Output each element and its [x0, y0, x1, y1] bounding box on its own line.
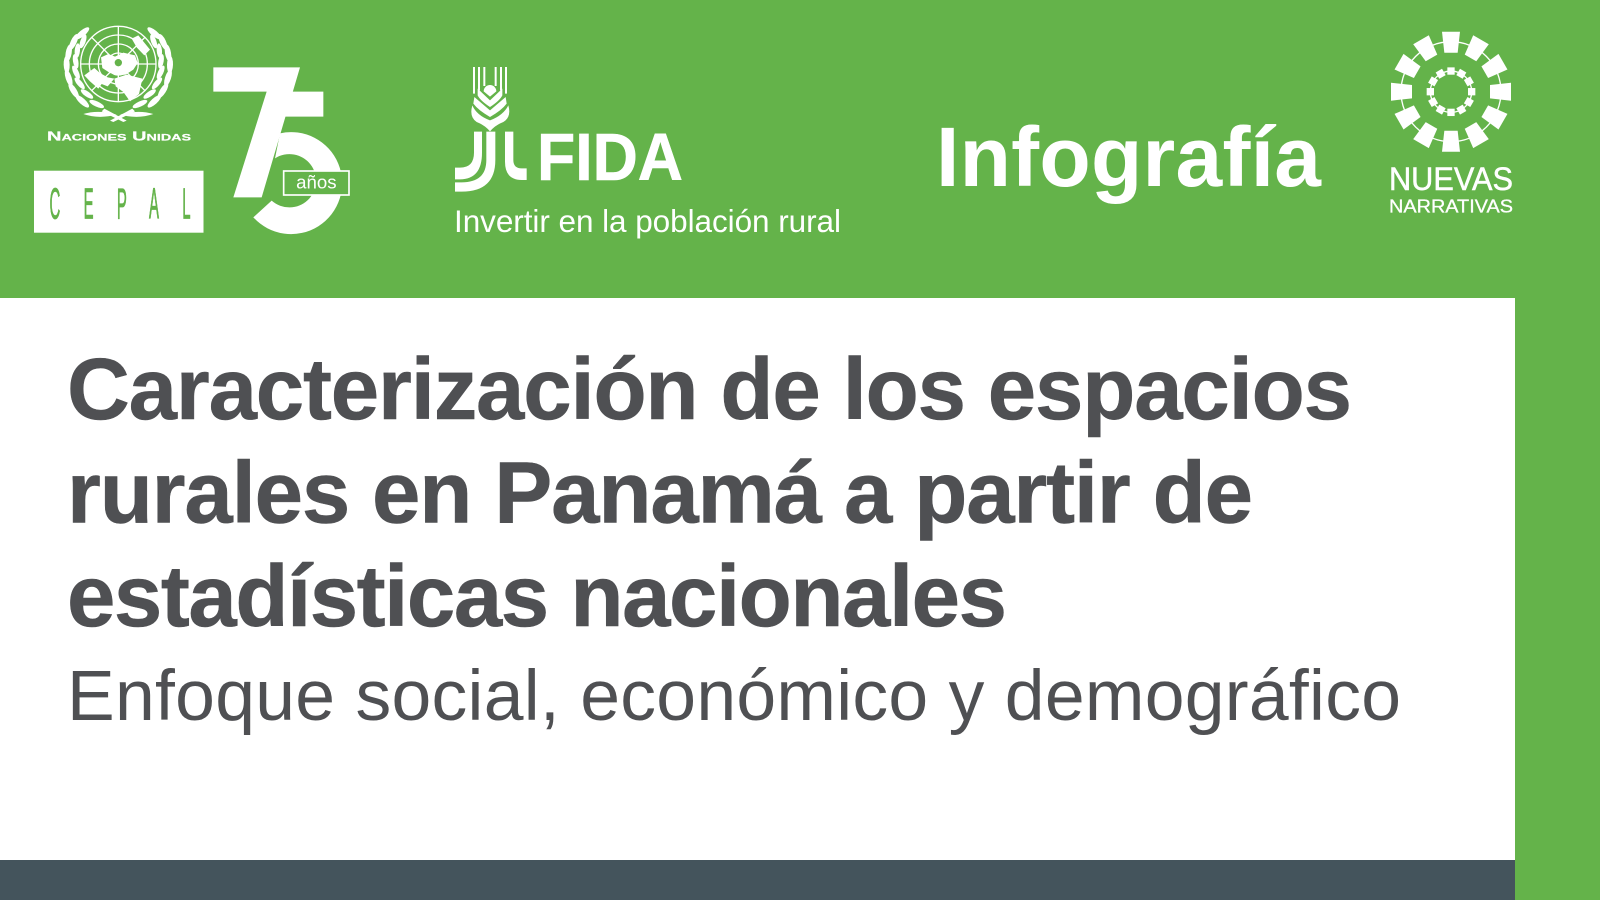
- logo text: Naciones Unidas: Naciones Unidas: [47, 130, 191, 144]
- logo text: Nuevas Narrativas: NUEVAS: [1389, 161, 1513, 197]
- logo text: Nuevas Narrativas: NARRATIVAS: [1389, 196, 1513, 217]
- tagline: Invertir en la población rural: Invertir en la población rural: [454, 203, 841, 239]
- white title panel: [0, 298, 1515, 860]
- logo: CEPAL box: CEPAL: [50, 178, 191, 228]
- logo: FIDA JJL mark: [455, 132, 527, 192]
- logo text: Nuevas Narrativas: [1389, 161, 1513, 217]
- dark footer bar: [0, 860, 1515, 900]
- title: rurales en Panamá a partir de: [67, 444, 1253, 542]
- logo: 75 años: [213, 67, 349, 234]
- label: Infografía: Infografía: [936, 110, 1322, 204]
- logo: Nuevas Narrativas ring: [1391, 32, 1511, 152]
- logo: CEPAL box: [34, 171, 204, 233]
- logo: United Nations emblem: [63, 25, 174, 122]
- logo text: FIDA: FIDA: [537, 120, 683, 195]
- logo: FIDA wheat: [471, 67, 509, 131]
- title: [67, 341, 1352, 645]
- title: Caracterización de los espacios: [67, 341, 1352, 438]
- logo: 75 años: años: [296, 172, 337, 193]
- title: estadísticas nacionales: [67, 548, 1007, 645]
- subtitle: Enfoque social, económico y demográfico: [67, 656, 1401, 736]
